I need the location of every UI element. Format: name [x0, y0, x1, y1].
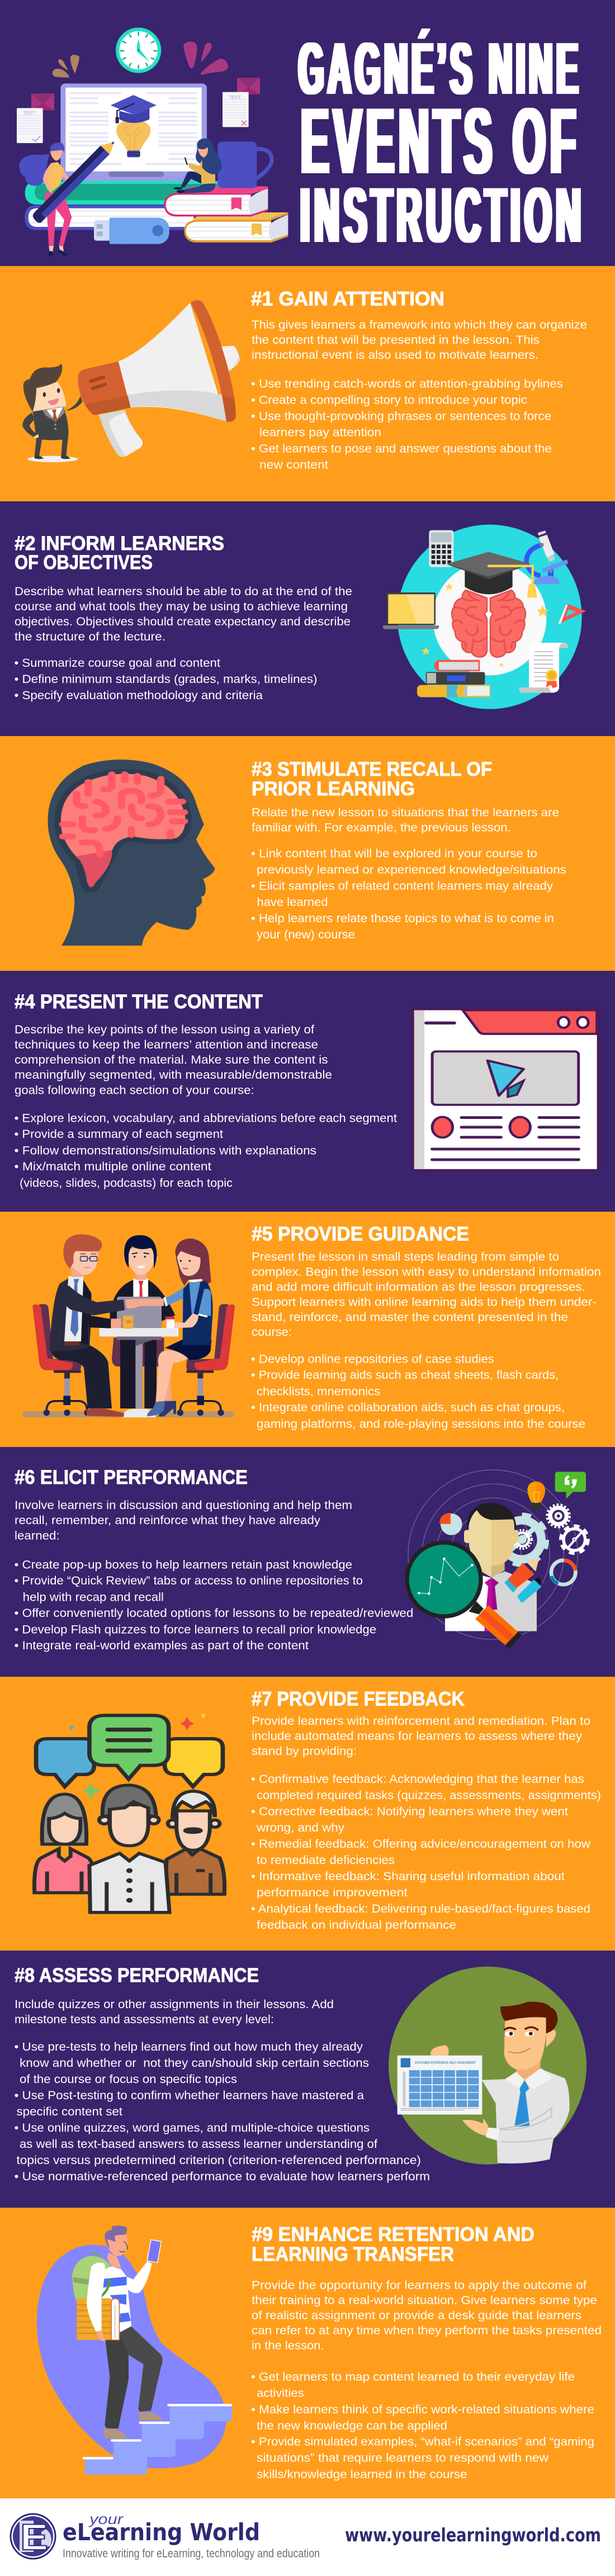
icon: microscope [527, 530, 568, 584]
heading: #1 GAIN ATTENTION [251, 287, 444, 310]
icon: seated woman [173, 139, 222, 193]
logo wordmark [63, 2511, 320, 2560]
icon: book under arm [77, 2262, 119, 2342]
bullet list [15, 657, 318, 702]
heading: #5 PROVIDE GUIDANCE [252, 1223, 469, 1245]
bullet list: your (new) course [257, 928, 355, 941]
heading: #8 ASSESS PERFORMANCE [15, 1964, 259, 1986]
text block: objectives. Objectives should create expectancy and describe [15, 615, 351, 628]
icon: envelopes [31, 78, 260, 110]
text block: can refer to at any time when they perform the tasks presented [252, 2324, 602, 2337]
icon: student [100, 2226, 163, 2439]
bullet list: • Integrate real-world examples as part of the content [15, 1639, 309, 1652]
bullet list [251, 847, 566, 941]
bullet list: • Analytical feedback: Delivering rule-based/fact-figures based [251, 1903, 590, 1915]
heading [252, 2223, 534, 2265]
bullet list: • Summarize course goal and content [15, 657, 220, 670]
illustration: three people with speech bubbles [34, 1714, 225, 1913]
bullet list [251, 378, 563, 472]
bullet list: • Provide learning aids such as cheat sheets, flash cards, [251, 1369, 559, 1382]
icon: stairs [83, 2404, 232, 2475]
icon: left chair [32, 1304, 91, 1416]
illustration: megaphone and businessman [22, 300, 240, 462]
bullet list [15, 2041, 430, 2183]
illustration: learner climbing stairs [37, 2226, 232, 2475]
bullet list: • Use trending catch-words or attention-grabbing bylines [251, 378, 563, 390]
icon: large gear [496, 1515, 547, 1565]
icon: gear top right [547, 1505, 570, 1527]
text block: learned: [15, 1529, 60, 1543]
bullet list [251, 2371, 594, 2481]
bullet list: • Make learners think of specific work-related situations where [251, 2403, 594, 2416]
icon: megaphone [78, 300, 240, 457]
text block: the content that will be presented in the lesson. This [252, 334, 540, 347]
bullet list: • Use normative-referenced performance to evaluate how learners perform [15, 2170, 430, 2183]
bullet list: learners pay attention [259, 426, 381, 439]
icon: blue speech bubble [36, 1739, 94, 1787]
bullet list: have learned [257, 896, 328, 909]
icon: backpack [72, 2252, 113, 2303]
icon: man [482, 2001, 570, 2164]
bullet list: know and whether or not they can/should skip certain sections [20, 2057, 369, 2070]
bullet list: • Provide a summary of each segment [15, 1128, 223, 1141]
bullet list: the new knowledge can be applied [257, 2420, 447, 2432]
bullet list: • Define minimum standards (grades, marks, timelines) [15, 673, 318, 686]
icon: green book [25, 181, 220, 205]
logo wordmark: Innovative writing for eLearning, technology and education [63, 2547, 320, 2560]
icon: logo globe: E [20, 2516, 48, 2558]
icon: stars [422, 583, 548, 667]
panel: #1 gain attention [0, 266, 615, 501]
text block: Present the lesson in small steps leading from simple to [252, 1251, 559, 1263]
bullet list: • Link content that will be explored in your course to [251, 847, 537, 860]
panel: #3 stimulate recall of prior learning [0, 736, 615, 971]
heading: #3 STIMULATE RECALL OF [252, 758, 492, 780]
bullet list: • Create a compelling story to introduce your topic [251, 393, 527, 407]
panel: #7 provide feedback [0, 1677, 615, 1951]
text block: Support learners with online learning aids to help them under- [252, 1296, 597, 1309]
heading: #9 ENHANCE RETENTION AND [252, 2223, 534, 2246]
icon: brain [452, 590, 526, 657]
text block [15, 585, 352, 643]
bullet list: • Corrective feedback: Notifying learners where they went [251, 1805, 568, 1818]
text block [252, 1251, 601, 1339]
heading: #2 INFORM LEARNERS [15, 532, 224, 554]
icon: businessman [22, 364, 82, 462]
bullet list: completed required tasks (quizzes, assessments, assignments) [257, 1789, 601, 1802]
icon: laptop [60, 83, 207, 181]
icon: brown splash [53, 55, 79, 78]
bullet list: help with recap and recall [23, 1591, 164, 1604]
bullet list [15, 1112, 397, 1189]
icon: clock [116, 27, 161, 73]
heading [252, 758, 492, 800]
icon: test card right [223, 92, 249, 127]
text block: Describe what learners should be able to do at the end of the [15, 585, 352, 598]
text block: Relate the new lesson to situations that the learners are [252, 806, 559, 819]
title [299, 27, 585, 259]
text block: Describe the key points of the lesson using a variety of [15, 1023, 314, 1036]
bullet list: • Provide simulated examples, “what-if scenarios” and “gaming [251, 2436, 594, 2449]
logo wordmark: your [88, 2511, 124, 2527]
icon: assessment sheet: CUSTOMER EXPERIENCE SELF-ASSESSMENT [415, 2061, 476, 2065]
text block: Involve learners in discussion and questioning and help them [15, 1499, 352, 1512]
bullet list: checklists, mnemonics [257, 1385, 380, 1398]
bullet list: • Get learners to map content learned to their everyday life [251, 2371, 575, 2384]
heading: #4 PRESENT THE CONTENT [15, 990, 263, 1013]
icon: right man [165, 1791, 225, 1894]
panel: #2 inform learners of objectives [0, 501, 615, 736]
bullet list: • Integrate online collaboration aids, such as chat groups, [251, 1401, 565, 1414]
icon: magnifier with chart [407, 1543, 522, 1649]
bullet list: gaming platforms, and role-playing sessions into the course [257, 1417, 585, 1431]
bullet list: situations” that require learners to respond with new [257, 2451, 549, 2465]
icon: test card left: TEST [23, 111, 35, 116]
bullet list: of the course or focus on specific topics [20, 2073, 237, 2086]
text block: This gives learners a framework into which they can organize [252, 319, 587, 331]
icon: usb drive [94, 217, 169, 244]
text block [252, 806, 559, 834]
icon: logo globe [11, 2514, 55, 2559]
text block: Provide learners with reinforcement and remediation. Plan to [252, 1715, 590, 1728]
panel: header [0, 0, 615, 266]
illustration: three people meeting at a table [22, 1234, 235, 1417]
icon: assessment sheet [398, 2056, 482, 2114]
bullet list: • Create pop-up boxes to help learners retain past knowledge [15, 1558, 352, 1572]
bullet list: • Use pre-tests to help learners find out how much they already [15, 2041, 363, 2053]
icon: graduation cap [447, 552, 537, 598]
bullet list: • Specify evaluation methodology and criteria [15, 689, 263, 702]
bullet list: • Offer conveniently located options for lessons to be repeated/reviewed [15, 1607, 413, 1620]
bullet list: • Elicit samples of related content learners may already [251, 880, 554, 893]
text block: complex. Begin the lesson with easy to understand information [252, 1265, 601, 1279]
text block [252, 319, 587, 362]
icon: right woman [147, 1239, 213, 1416]
bullet list: • Explore lexicon, vocabulary, and abbreviations before each segment [15, 1112, 397, 1125]
icon: pencil [504, 1558, 539, 1592]
bullet list: • Use thought-provoking phrases or sentences to force [251, 410, 551, 423]
illustration: man with magnifier and gears [407, 1470, 588, 1649]
icon: yellow speech bubble [165, 1739, 223, 1787]
text block: and add more difficult information as the lesson progresses. [252, 1281, 585, 1293]
bullet list: activities [257, 2387, 304, 2400]
icon: large white book [25, 205, 194, 230]
panel: #5 provide guidance [0, 1212, 615, 1447]
icon: speech bubble [555, 1472, 586, 1499]
icon: light bulb with graduation cap [111, 95, 157, 157]
bullet list [15, 1558, 413, 1652]
icon: yellow book [184, 212, 288, 243]
icon: woman [34, 1794, 96, 1892]
bullet list: • Confirmative feedback: Acknowledging that the learner has [251, 1773, 584, 1786]
icon: pink book [164, 186, 268, 216]
text block: familiar with. For example, the previous lesson. [252, 822, 511, 834]
text block: milestone tests and assessments at every level: [15, 2013, 274, 2026]
bullet list: topics versus predetermined criterion (criterion-referenced performance) [17, 2154, 421, 2167]
bullet list: to remediate deficiencies [257, 1854, 395, 1867]
bullet list: • Provide “Quick Review” tabs or access to online repositories to [15, 1574, 363, 1587]
icon: hands [430, 2045, 499, 2141]
panel: #8 assess performance [0, 1951, 615, 2208]
heading: LEARNING TRANSFER [252, 2243, 454, 2265]
heading: PRIOR LEARNING [252, 777, 415, 800]
text block: in the lesson. [252, 2340, 324, 2352]
icon: green speech bubble [89, 1715, 169, 1779]
icon: donut chart [551, 1560, 575, 1584]
icon: pie chart [439, 1513, 462, 1535]
icon: person [445, 1503, 537, 1631]
icon: test card right: TEST [229, 95, 241, 100]
text block [252, 1715, 590, 1758]
heading: OF OBJECTIVES [15, 551, 153, 573]
icon: marker [517, 1578, 542, 1603]
illustration: laptop, books and learners [17, 27, 288, 257]
bullet list: • Develop Flash quizzes to force learners to recall prior knowledge [15, 1623, 376, 1636]
icon: pink splash [183, 42, 228, 75]
bullet list: previously learned or experienced knowledge/situations [257, 864, 566, 876]
bullet list: wrong, and why [256, 1821, 345, 1834]
icon: mug [217, 141, 272, 188]
icon: set square [558, 604, 586, 624]
text block [252, 2279, 602, 2352]
bullet list: • Remedial feedback: Offering advice/encouragement on how [251, 1838, 591, 1851]
illustration: head with brain [48, 760, 215, 946]
bullet list: • Use online quizzes, word games, and multiple-choice questions [15, 2122, 370, 2134]
text block: stand, reinforce, and master the content presented in the [252, 1311, 568, 1323]
icon: gear with needle [561, 1526, 588, 1553]
icon: middle man [110, 1235, 175, 1408]
text block [15, 1998, 334, 2026]
illustration: browser window with play button [411, 1007, 600, 1171]
icon: test card left [17, 108, 43, 143]
icon: small white gear [513, 1530, 532, 1549]
bullet list: • Informative feedback: Sharing useful information about [251, 1870, 565, 1883]
icon: right chair [177, 1304, 235, 1416]
text block: Include quizzes or other assignments in their lessons. Add [15, 1998, 334, 2011]
text block: the structure of the lecture. [15, 630, 165, 643]
icon: left man [49, 1234, 164, 1417]
bullet list: • Follow demonstrations/simulations with explanations [15, 1145, 316, 1157]
bullet list: • Get learners to pose and answer questions about the [251, 443, 552, 455]
icon: diploma [519, 643, 568, 692]
bullet list: • Help learners relate those topics to what is to come in [251, 912, 554, 925]
illustration: man holding assessment sheet [389, 1967, 586, 2165]
heading: #6 ELICIT PERFORMANCE [15, 1466, 248, 1488]
illustration: brain with graduation cap [383, 525, 586, 709]
text block: include automated means for learners to assess where they [252, 1730, 583, 1743]
bullet list [251, 1353, 585, 1431]
icon: book stack [417, 660, 490, 697]
panel: footer [0, 2498, 615, 2576]
icon: bulb [527, 1482, 545, 1509]
bullet list: performance improvement [257, 1886, 408, 1899]
text block: instructional event is also used to motivate learners. [252, 349, 538, 362]
icon: standing woman with pencil [19, 141, 114, 257]
bullet list: new content [259, 458, 328, 472]
text block: their training to a real-world situation. Give learners some type [252, 2294, 597, 2307]
bullet list: specific content set [17, 2105, 122, 2118]
bullet list: feedback on individual performance [257, 1919, 456, 1932]
text block: comprehension of the material. Make sure the content is [15, 1054, 328, 1066]
icon: sparkles [69, 1714, 205, 1796]
panel: #9 enhance retention and learning transfer [0, 2208, 615, 2498]
text block: of realistic assignment or provide a desk guide that learners [252, 2309, 581, 2322]
bullet list: • Develop online repositories of case studies [251, 1353, 494, 1366]
bullet list: skills/knowledge learned in the course [257, 2468, 467, 2481]
panel: #4 present the content [0, 971, 615, 1212]
icon: laptop and table [100, 1297, 178, 1417]
bullet list: • Mix/match multiple online content [15, 1160, 211, 1173]
icon: calculator [429, 530, 453, 567]
text block: recall, remember, and reinforce what they have already [15, 1514, 321, 1527]
text block [15, 1023, 332, 1097]
text block: course: [252, 1326, 292, 1339]
text block: Provide the opportunity for learners to apply the outcome of [252, 2279, 586, 2292]
icon: laptop [383, 592, 439, 629]
icon: center man [89, 1785, 169, 1913]
text block: course and what tools they may be using to achieve learning [15, 600, 348, 613]
heading [15, 532, 224, 573]
bullet list: as well as text-based answers to assess learner understanding of [20, 2138, 377, 2151]
heading: #7 PROVIDE FEEDBACK [252, 1688, 465, 1710]
bullet list [251, 1773, 601, 1932]
text block: stand by providing: [252, 1745, 357, 1758]
panel: #6 elicit performance [0, 1447, 615, 1677]
text block: meaningfully segmented, with measurable/demonstrable [15, 1069, 332, 1081]
text block: goals following each section of your course: [15, 1084, 254, 1097]
logo wordmark: eLearning World [63, 2518, 260, 2546]
text block: techniques to keep the learners’ attention and increase [15, 1038, 318, 1051]
text block [15, 1499, 352, 1543]
bullet list: • Use Post-testing to confirm whether learners have mastered a [15, 2089, 364, 2102]
bullet list: (videos, slides, podcasts) for each topic [20, 1177, 233, 1189]
